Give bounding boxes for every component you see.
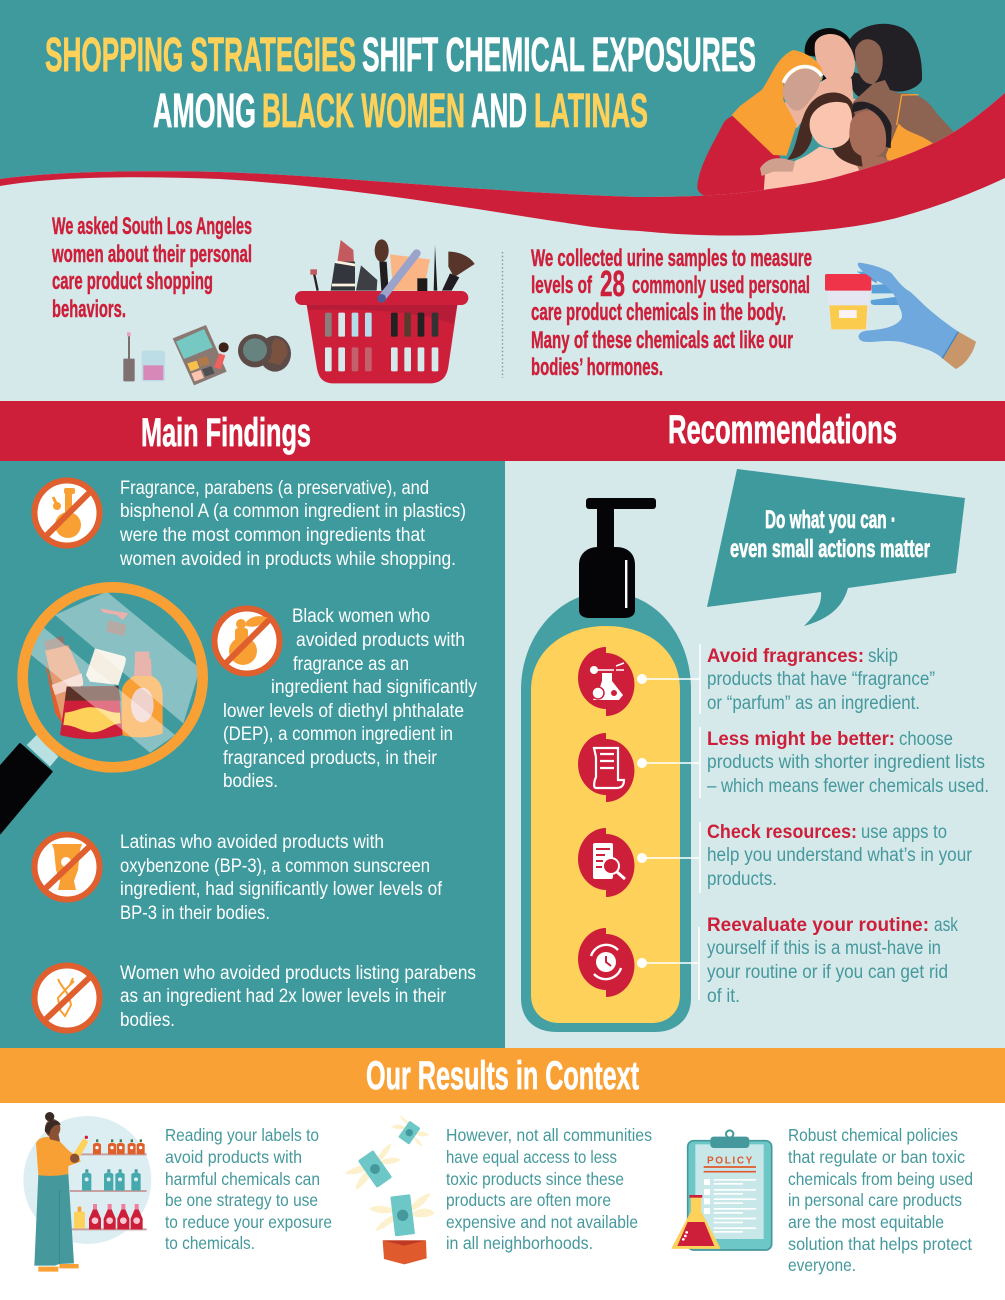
text: sample collection: 28 [600, 263, 625, 304]
text: reading labels [165, 1125, 332, 1253]
text: less might be better: products with shorter ingredient lists [707, 752, 985, 773]
header panel [0, 0, 1005, 240]
illustration: group of women [697, 24, 955, 213]
title: BLACK WOMEN [262, 85, 465, 138]
panel: recommendations [505, 461, 1005, 1048]
icon: no fragrance bottle [214, 608, 280, 674]
connector lines [637, 644, 700, 1000]
text: finding 2: ingredient had significantly [271, 677, 477, 698]
text: chemical policies: are the most equitable [788, 1212, 944, 1232]
text: survey description: We asked South Los Angeles [52, 213, 252, 240]
text: finding 2: (DEP), a common ingredient in [223, 724, 453, 745]
panel: results in context [23, 1112, 973, 1275]
illustration: woman reading labels [23, 1112, 151, 1272]
title: AMONG [153, 85, 256, 138]
title [45, 29, 756, 138]
text: finding 4: as an ingredient had 2x lower levels in their [120, 986, 447, 1007]
icon: magnifying glass over products [0, 587, 203, 833]
text: finding 2: avoided products with [296, 630, 465, 651]
text: reevaluate your routine [707, 915, 958, 1007]
text: avoid fragrances: or “parfum” as an ingredient. [707, 693, 920, 714]
text: finding 2: Black women who [292, 606, 430, 627]
text: unequal access: products are often more [446, 1190, 611, 1210]
text: less might be better [707, 729, 989, 797]
band: results heading [0, 1048, 1005, 1103]
text: survey description [51, 213, 252, 323]
band: results heading: Our Results in Context [366, 1054, 639, 1098]
icon: phone app search [578, 828, 634, 897]
text: reading labels: be one strategy to use [165, 1190, 318, 1210]
text: finding 3: BP-3 in their bodies. [120, 903, 270, 924]
text: chemical policies: everyone. [788, 1255, 856, 1275]
text: reading labels: to reduce your exposure [165, 1212, 332, 1232]
illustration: policy clipboard and flask [672, 1130, 772, 1250]
text: reevaluate your routine: ask [934, 915, 958, 936]
text: finding 2: lower levels of diethyl phthalate [223, 701, 464, 722]
band: section headings [0, 401, 1005, 461]
text: reevaluate your routine: Reevaluate your routine: [707, 915, 929, 936]
text: chemical policies [788, 1125, 973, 1275]
text: reading labels: harmful chemicals can [165, 1169, 320, 1189]
text: unequal access [446, 1125, 652, 1253]
text: check resources: Check resources: [707, 822, 857, 843]
text: finding 3: Latinas who avoided products with [120, 832, 384, 853]
icon: short ingredient list [578, 733, 634, 802]
text: chemical policies: Robust chemical policies [788, 1125, 958, 1145]
heading: main findings: Main Findings [141, 411, 311, 455]
illustration: policy clipboard and flask: POLICY [707, 1156, 753, 1167]
illustration: money flying from wallet [345, 1115, 435, 1264]
title: SHOPPING STRATEGIES [45, 29, 356, 82]
text: finding 2: bodies. [223, 771, 278, 792]
text: finding 1: Fragrance, parabens (a preservative), and [120, 478, 429, 499]
text: check resources [707, 822, 973, 890]
text: sample collection: Many of these chemicals act like our [531, 327, 793, 354]
text: chemical policies: chemicals from being used [788, 1169, 973, 1189]
text: finding 2: fragrance as an [293, 654, 409, 675]
text: avoid fragrances: products that have “fragrance” [707, 669, 935, 690]
text: finding 1: bisphenol A (a common ingredient in plastics) [120, 501, 466, 522]
text: unequal access: toxic products since these [446, 1169, 624, 1189]
icon: avoid fragrance [578, 647, 634, 716]
text: survey description: women about their personal [51, 241, 252, 268]
text: finding 4: Women who avoided products listing parabens [120, 963, 476, 984]
icon: no sunscreen [34, 834, 100, 900]
text: finding 4 [120, 963, 476, 1031]
icon: cosmetics [123, 325, 291, 385]
text: less might be better: choose [899, 729, 953, 750]
text: check resources: use apps to [861, 822, 947, 843]
text: check resources: help you understand what’s in your [707, 845, 973, 866]
text: chemical policies: that regulate or ban toxic [788, 1147, 965, 1167]
text: survey description: behaviors. [52, 296, 126, 323]
text: chemical policies: in personal care products [788, 1190, 962, 1210]
text: unequal access: have equal access to less [446, 1147, 617, 1167]
callout: do what you can: Do what you can · [765, 506, 896, 534]
text: finding 1 [119, 478, 466, 570]
text: sample collection: We collected urine samples to measure [531, 245, 812, 272]
text: sample collection: levels of [531, 272, 593, 299]
text: finding 4: bodies. [120, 1010, 175, 1031]
text: finding 3: oxybenzone (BP-3), a common sunscreen [120, 856, 430, 877]
text: reevaluate your routine: yourself if this is a must-have in [707, 938, 941, 959]
panel: intro background [0, 93, 1005, 402]
text: reading labels: to chemicals. [165, 1233, 255, 1253]
text: less might be better: Less might be better: [707, 729, 895, 750]
text: finding 2 [223, 606, 477, 792]
text: reevaluate your routine: your routine or if you can get rid [707, 962, 948, 983]
icon: gloved hand with urine cup [825, 263, 976, 369]
text: check resources: products. [707, 869, 777, 890]
text: finding 1: were the most common ingredients that [119, 525, 426, 546]
text: finding 2: fragranced products, in their [223, 748, 438, 769]
text: finding 3: ingredient, had significantly lower levels of [120, 879, 443, 900]
divider [502, 252, 504, 378]
panel: survey intro [51, 213, 976, 385]
red wave ribbon [0, 93, 1005, 236]
text: finding 3 [120, 832, 443, 924]
icon: no parabens molecule [34, 966, 100, 1030]
icon: routine clock [578, 928, 634, 997]
callout: do what you can [707, 469, 965, 626]
text: unequal access: in all neighborhoods. [446, 1233, 593, 1253]
text: finding 1: women avoided in products while shopping. [119, 549, 456, 570]
panel: main findings [0, 461, 505, 1048]
text: sample collection: commonly used personal [632, 272, 810, 299]
text: avoid fragrances: Avoid fragrances: [707, 646, 864, 667]
text: reading labels: avoid products with [165, 1147, 302, 1167]
text: sample collection: bodies’ hormones. [531, 354, 663, 381]
icon: no fragrance ingredient flask [34, 480, 100, 546]
text: survey description: care product shopping [52, 268, 213, 295]
text: unequal access: expensive and not available [446, 1212, 638, 1232]
text: unequal access: However, not all communities [446, 1125, 652, 1145]
text: reading labels: Reading your labels to [165, 1125, 319, 1145]
text: reevaluate your routine: of it. [707, 986, 740, 1007]
icon: shopping basket [295, 239, 475, 383]
text: avoid fragrances [707, 646, 935, 714]
text: sample collection: care product chemicals in the body. [531, 299, 786, 326]
title: LATINAS [534, 85, 648, 138]
text: chemical policies: solution that helps protect [788, 1234, 972, 1254]
text: avoid fragrances: skip [868, 646, 898, 667]
title: AND [471, 85, 527, 138]
text: sample collection [531, 245, 812, 381]
illustration: pump bottle [521, 498, 691, 1032]
